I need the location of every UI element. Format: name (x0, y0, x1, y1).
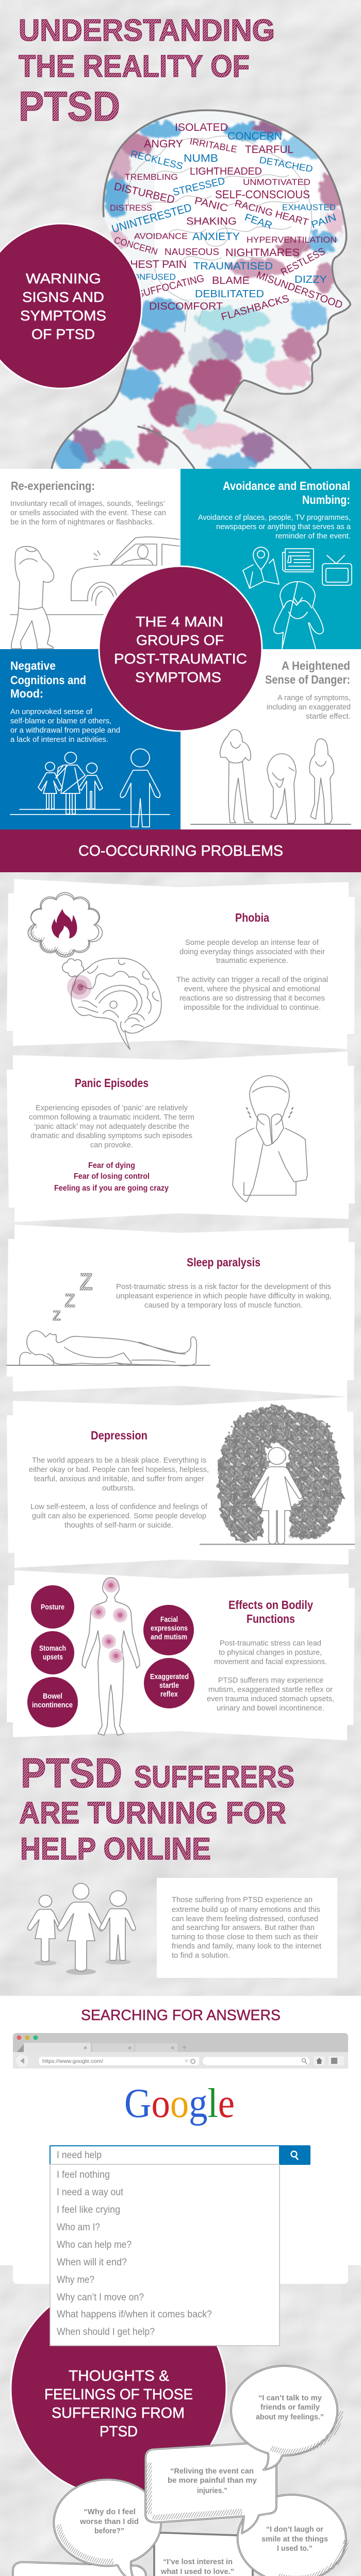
bubble: exaggerated startle reflex (144, 1658, 194, 1708)
panel: effects on bodily functions: urinary and bowel incontinence. (217, 1704, 324, 1713)
panel: phobia: impossible for the individual to continue. (184, 1004, 321, 1012)
callout: warning signs and symptoms: OF PTSD (31, 326, 95, 342)
bubble: posture (31, 1585, 74, 1629)
word cloud: NAUSEOUS (165, 247, 219, 257)
speech bubble: can't talk to friends: “I can’t talk to my (258, 2394, 322, 2402)
speech bubble: don't laugh or smile: I used to.” (277, 2544, 313, 2553)
body outline with pain points (82, 1578, 140, 1735)
panel: effects on bodily functions: mutism, exaggerated startle reflex or (208, 1686, 333, 1694)
word cloud: ANGRY (144, 138, 183, 150)
speech bubble: reliving the event: be more painful than my (168, 2476, 257, 2485)
panel: searching for answers background (0, 1996, 361, 2265)
panel: phobia: Some people develop an intense fear of (185, 939, 319, 947)
word cloud: FEAR (243, 212, 274, 232)
word cloud: SHAKING (186, 216, 237, 227)
icon: sleep z letters (53, 1268, 93, 1324)
panel: sleep paralysis: caused by a temporary loss of muscle function. (144, 1301, 303, 1310)
icon: scribble cloud around woman (200, 1405, 355, 1545)
text box: searching online: extreme build up of many emotions and this (172, 1906, 320, 1914)
word cloud: UNMOTIVATED (243, 177, 310, 187)
crumpled paper background: middle (0, 871, 361, 1999)
panel: negative cognitions and mood: or a withdrawal from people and (10, 726, 120, 735)
bubble: facial expressions and mutism: and mutism (151, 1633, 187, 1641)
speech bubble: why do I feel worse (54, 2480, 161, 2576)
speech bubble: why do I feel worse: worse than I did (79, 2517, 139, 2526)
text box: searching online: Those suffering from PTSD experience an (172, 1896, 313, 1904)
panel: negative cognitions and mood: a lack of interest in activities. (10, 736, 108, 744)
callout: warning signs and symptoms: SYMPTOMS (20, 308, 106, 324)
heading: PTSD sufferers are turning for help online (19, 1750, 294, 1866)
panel: panic episodes: Fear of losing control (74, 1172, 150, 1181)
heading band: co-occurring problems: CO-OCCURRING PROBLEMS (78, 843, 283, 859)
word cloud: DISCOMFORT (149, 301, 223, 312)
icon: three startled figures (191, 730, 351, 824)
panel: effects on bodily functions: Post-traumatic stress can lead (220, 1639, 321, 1648)
panel: phobia: reactions are so distressing that it becomes (179, 994, 325, 1003)
word cloud: DETACHED (258, 155, 314, 174)
heading: PTSD sufferers are turning for help online: HELP ONLINE (20, 1832, 211, 1866)
text box: searching online: friends and family, many look to the internet (172, 1942, 321, 1951)
speech bubble: reliving the event (145, 2443, 276, 2533)
bubble: bowel incontinence (27, 1677, 78, 1727)
bubble: facial expressions and mutism: expressions (151, 1624, 188, 1633)
word cloud: AVOIDANCE (134, 231, 188, 241)
panel: heightened sense of danger: Sense of Danger: (265, 673, 350, 686)
bubble: stomach upsets: upsets (43, 1653, 63, 1662)
panel: phobia: Phobia (235, 911, 269, 924)
panel: panic episodes: ‘panic attack’ may not adequately describe the (34, 1123, 189, 1131)
bubble: exaggerated startle reflex: reflex (160, 1690, 178, 1699)
word cloud: PANIC (193, 195, 229, 214)
panel: phobia: doing everyday things associated with their (179, 948, 325, 956)
panel: panic episodes: Panic Episodes (75, 1076, 149, 1090)
icon: person lying on pillow (7, 1331, 210, 1366)
icon: family holding hands (28, 1884, 136, 1975)
panel: avoidance and emotional numbing: Avoidance of places, people, TV programmes, (198, 514, 351, 522)
panel: panic episodes: common following a traumatic incident. The term (29, 1113, 194, 1122)
search suggestions dropdown: I feel nothing (57, 2170, 110, 2180)
bubble: facial expressions and mutism (143, 1605, 194, 1655)
search suggestions dropdown (50, 2164, 280, 2346)
word cloud: DISTURBED (113, 180, 176, 206)
panel: effects on bodily functions: Effects on Bodily (228, 1598, 313, 1612)
browser window mockup: + (182, 2043, 187, 2052)
icon: television (322, 555, 352, 585)
panel: heightened sense of danger: A Heightened (282, 659, 350, 672)
word cloud: ANXIETY (192, 231, 240, 243)
text box: searching online (157, 1878, 337, 1978)
word cloud: DIZZY (294, 274, 327, 285)
word cloud: RACING HEART (234, 198, 310, 228)
panel: effects on bodily functions: movement and facial expressions. (214, 1658, 327, 1666)
word cloud: CHEST PAIN (122, 259, 187, 270)
speech bubble: lost interest: what I used to love.” (160, 2567, 234, 2576)
panel: panic episodes: dramatic and disabling symptoms such episodes (30, 1132, 192, 1140)
panel: depression: The world appears to be a bleak place. Everything is (32, 1456, 206, 1465)
search suggestions dropdown: Why me? (57, 2275, 94, 2285)
word cloud: TEARFUL (245, 144, 293, 156)
icon: small thought bubble (62, 959, 84, 977)
speech bubble: am I to blame (13, 2562, 146, 2576)
panel: depression: thoughts of self-harm or suicide. (64, 1521, 173, 1530)
speech bubble: lost interest (154, 2533, 253, 2576)
search box (50, 2145, 310, 2165)
browser window mockup (13, 2033, 348, 2284)
text box: searching online: and searching for answers. But rather than (172, 1924, 315, 1932)
heading: PTSD sufferers are turning for help online: SUFFERERS (134, 1760, 294, 1794)
callout: thoughts and feelings: FEELINGS OF THOSE (44, 2386, 193, 2403)
panel: effects on bodily functions: Functions (247, 1612, 295, 1625)
crumpled paper background: thoughts (0, 2262, 361, 2576)
word cloud: TRAUMATISED (193, 261, 273, 272)
heading: searching for answers: SEARCHING FOR ANSWERS (81, 2007, 281, 2024)
callout: thoughts and feelings: SUFFERING FROM (52, 2405, 185, 2421)
text box: searching online: can leave them feeling distressed, confused (172, 1915, 318, 1923)
icon: map pin (243, 547, 279, 588)
panel: effects on bodily functions: even trauma induced stomach upsets, (207, 1695, 334, 1703)
speech bubble: don't laugh or smile: “I don’t laugh or (266, 2525, 323, 2534)
browser window mockup: × (171, 2044, 174, 2052)
search suggestions dropdown: Why can’t I move on? (57, 2292, 144, 2303)
callout: warning signs and symptoms: SIGNS AND (22, 289, 104, 305)
panel: panic episodes: Experiencing episodes of ‘panic’ are relatively (36, 1104, 188, 1112)
search suggestions dropdown: Who am I? (57, 2222, 100, 2233)
panel: negative cognitions and mood: Negative (10, 659, 56, 672)
speech bubble: can't talk to friends: about my feelings.” (256, 2413, 324, 2421)
speech bubble: lost interest: “I’ve lost interest in (163, 2557, 233, 2566)
panel: avoidance and emotional numbing (180, 469, 361, 649)
search suggestions dropdown: When should I get help? (57, 2327, 155, 2337)
icon: car and ground (10, 537, 179, 615)
icon: sleep z letters: Z (53, 1308, 61, 1324)
bubble: facial expressions and mutism: Facial (160, 1615, 178, 1624)
word cloud: PAIN (310, 212, 338, 231)
word cloud: CONCERN (227, 130, 282, 142)
callout: thoughts and feelings (11, 2281, 226, 2497)
panel: panic episodes: Fear of dying (88, 1161, 135, 1170)
bubble: bowel incontinence: Bowel (43, 1692, 62, 1701)
word cloud: NUMB (184, 152, 218, 164)
word cloud: NIGHTMARES (225, 247, 300, 259)
icon: family and lone person (10, 749, 170, 827)
word cloud: DEBILITATED (195, 289, 264, 300)
panel: heightened sense of danger: startle effect. (306, 713, 351, 721)
panel: negative cognitions and mood: self-blame or blame of others, (10, 717, 111, 725)
bubble: exaggerated startle reflex: Exaggerated (150, 1672, 189, 1681)
word cloud: TREMBLING (125, 172, 178, 182)
text box: searching online: turning to those close to them such as their (172, 1933, 318, 1941)
browser window mockup: × (128, 2044, 132, 2052)
icon: brain with highlighted area (67, 958, 161, 1049)
speech bubble: why do I feel worse: before?” (94, 2527, 124, 2535)
panel: avoidance and emotional numbing: newspapers or anything that serves as a (216, 523, 351, 531)
panel: phobia: event, where the physical and emotional (184, 985, 320, 993)
icon: sleep z letters: Z (79, 1268, 93, 1295)
word cloud: EXHAUSTED (282, 202, 336, 212)
word cloud: SELF-CONSCIOUS (215, 188, 310, 201)
panel: sleep paralysis: Post-traumatic stress is a risk factor for the development of this (116, 1283, 331, 1291)
search box: I need help (57, 2150, 102, 2161)
panel: depression: tearful, anxious and irritable, and suffer from anger (34, 1475, 204, 1483)
icon: panicking person (233, 1076, 307, 1202)
word cloud: UNINTERESTED (110, 201, 193, 235)
panel: re-experiencing (0, 469, 180, 649)
icon: newspaper (283, 549, 314, 572)
panel: panic episodes (7, 1052, 355, 1222)
panel: depression: guilt can also be experienced. Some people develop (32, 1512, 206, 1520)
icon: man holding head (11, 547, 54, 649)
panel: heightened sense of danger: including an exaggerated (267, 703, 351, 711)
search suggestions dropdown: When will it end? (57, 2257, 127, 2268)
title: understanding the reality of PTSD: UNDERSTANDING (19, 13, 275, 47)
word cloud: IRRITABLE (189, 136, 238, 155)
search suggestions dropdown: Who can help me? (57, 2240, 132, 2250)
title: understanding the reality of PTSD (19, 13, 275, 130)
text box: searching online: to find a solution. (172, 1952, 230, 1960)
bubble: stomach upsets: Stomach (39, 1644, 66, 1653)
word cloud: HYPERVENTILATION (247, 235, 337, 245)
panel: negative cognitions and mood (0, 649, 180, 829)
panel: depression: Depression (91, 1429, 147, 1442)
speech bubble: don't laugh or smile: smile at the things (261, 2535, 328, 2544)
panel: depression: either okay or bad. People can feel hopeless, helpless, (29, 1466, 209, 1474)
panel: heightened sense of danger (180, 649, 361, 829)
heading: PTSD sufferers are turning for help online: ARE TURNING FOR (19, 1796, 286, 1830)
callout: warning signs and symptoms: WARNING (26, 270, 101, 286)
panel: avoidance and emotional numbing: reminder of the event. (275, 532, 351, 540)
panel: heightened sense of danger: A range of symptoms, (277, 694, 351, 702)
heading band: co-occurring problems (0, 829, 361, 872)
word cloud (110, 122, 344, 323)
word cloud: CONFUSED (126, 272, 176, 282)
speech bubble: don't laugh or smile (238, 2495, 346, 2576)
panel: phobia: traumatic experience. (216, 957, 288, 965)
callout: thoughts and feelings: THOUGHTS & (69, 2368, 169, 2384)
panel: re-experiencing: or smells associated with the event. These can (10, 509, 166, 517)
bubble: bowel incontinence: incontinence (32, 1701, 73, 1709)
panel: depression (7, 1397, 355, 1568)
bubble: posture: Posture (41, 1603, 64, 1612)
word cloud: STRESSED (172, 175, 226, 198)
crumpled paper background: hero (0, 0, 361, 474)
panel: panic episodes: Feeling as if you are going crazy (54, 1184, 169, 1193)
speech bubble: can't talk to friends: friends or family (260, 2403, 320, 2412)
speech bubble: reliving the event: injuries.” (197, 2486, 227, 2495)
bubble: exaggerated startle reflex: startle (159, 1681, 179, 1690)
word cloud: RECKLESS (129, 148, 184, 172)
word cloud: ISOLATED (175, 122, 228, 133)
panel: sleep paralysis: unpleasant experience in which people have difficulty in waking, (116, 1292, 332, 1300)
panel: panic episodes: can provoke. (90, 1141, 133, 1149)
icon: thought cloud with flame (28, 892, 102, 957)
heading: PTSD sufferers are turning for help online: PTSD (21, 1750, 122, 1797)
panel: sleep paralysis: Sleep paralysis (187, 1256, 260, 1269)
browser window mockup: https://www.google.com/ (42, 2058, 103, 2064)
bubble: stomach upsets (31, 1631, 74, 1674)
word cloud: DISTRESS (110, 203, 152, 213)
head silhouette with watercolour and word cloud (46, 103, 356, 476)
panel: negative cognitions and mood: Cognitions and (10, 673, 86, 687)
search suggestions dropdown: What happens if/when it comes back? (57, 2309, 212, 2320)
word cloud: CONCERN (113, 235, 159, 257)
panel: negative cognitions and mood: Mood: (10, 687, 43, 700)
search suggestions dropdown: I need a way out (57, 2187, 124, 2198)
title: understanding the reality of PTSD: PTSD (19, 83, 120, 130)
panel: re-experiencing: Involuntary recall of images, sounds, ‘feelings’ (10, 500, 165, 508)
icon: person covering eyes (274, 582, 323, 649)
browser window mockup: × (84, 2044, 87, 2052)
word cloud: SUFFOCATING (136, 273, 205, 300)
panel: avoidance and emotional numbing: Numbing: (302, 493, 350, 506)
panel: sleep paralysis (7, 1225, 355, 1397)
word cloud: LIGHTHEADED (190, 166, 262, 177)
panel: depression: outbursts. (102, 1484, 136, 1493)
watercolour splashes (46, 103, 356, 476)
speech bubble: can't talk to friends (231, 2366, 340, 2470)
google logo: Google (124, 2081, 235, 2126)
callout: thoughts and feelings: PTSD (100, 2424, 138, 2440)
panel: re-experiencing: be in the form of nightmares or flashbacks. (10, 518, 154, 527)
callout: the 4 main groups: GROUPS OF (136, 632, 224, 648)
panel: effects on bodily functions: PTSD sufferers may experience (218, 1676, 323, 1685)
title: understanding the reality of PTSD: THE REALITY OF (19, 49, 250, 83)
head outline (52, 110, 350, 469)
word cloud: MISUNDERSTOOD (255, 269, 344, 311)
callout: the 4 main groups (99, 566, 262, 731)
panel: re-experiencing: Re-experiencing: (11, 479, 95, 493)
word cloud: FLASHBACKS (220, 293, 290, 323)
callout: the 4 main groups: POST-TRAUMATIC (114, 651, 247, 667)
panel: depression: Low self-esteem, a loss of confidence and feelings of (30, 1503, 208, 1511)
panel: effects on bodily functions (7, 1570, 355, 1740)
icon: sleep z letters: Z (64, 1290, 75, 1311)
panel: phobia (7, 879, 355, 1049)
panel: phobia: The activity can trigger a recall of the original (176, 976, 328, 984)
search suggestions dropdown: I feel like crying (57, 2205, 120, 2215)
word cloud: BLAME (212, 275, 250, 286)
callout: the 4 main groups: THE 4 MAIN (136, 614, 223, 630)
speech bubble: why do I feel worse: “Why do I feel (84, 2507, 136, 2516)
word cloud: RESTLESS (279, 246, 327, 278)
brain line drawing (128, 136, 312, 332)
speech bubble: reliving the event: “Reliving the event can (170, 2467, 254, 2476)
panel: negative cognitions and mood: An unprovoked sense of (10, 708, 93, 716)
panel: effects on bodily functions: to physical changes in posture, (219, 1649, 322, 1657)
callout: warning signs and symptoms (0, 224, 142, 388)
callout: the 4 main groups: SYMPTOMS (135, 669, 221, 685)
